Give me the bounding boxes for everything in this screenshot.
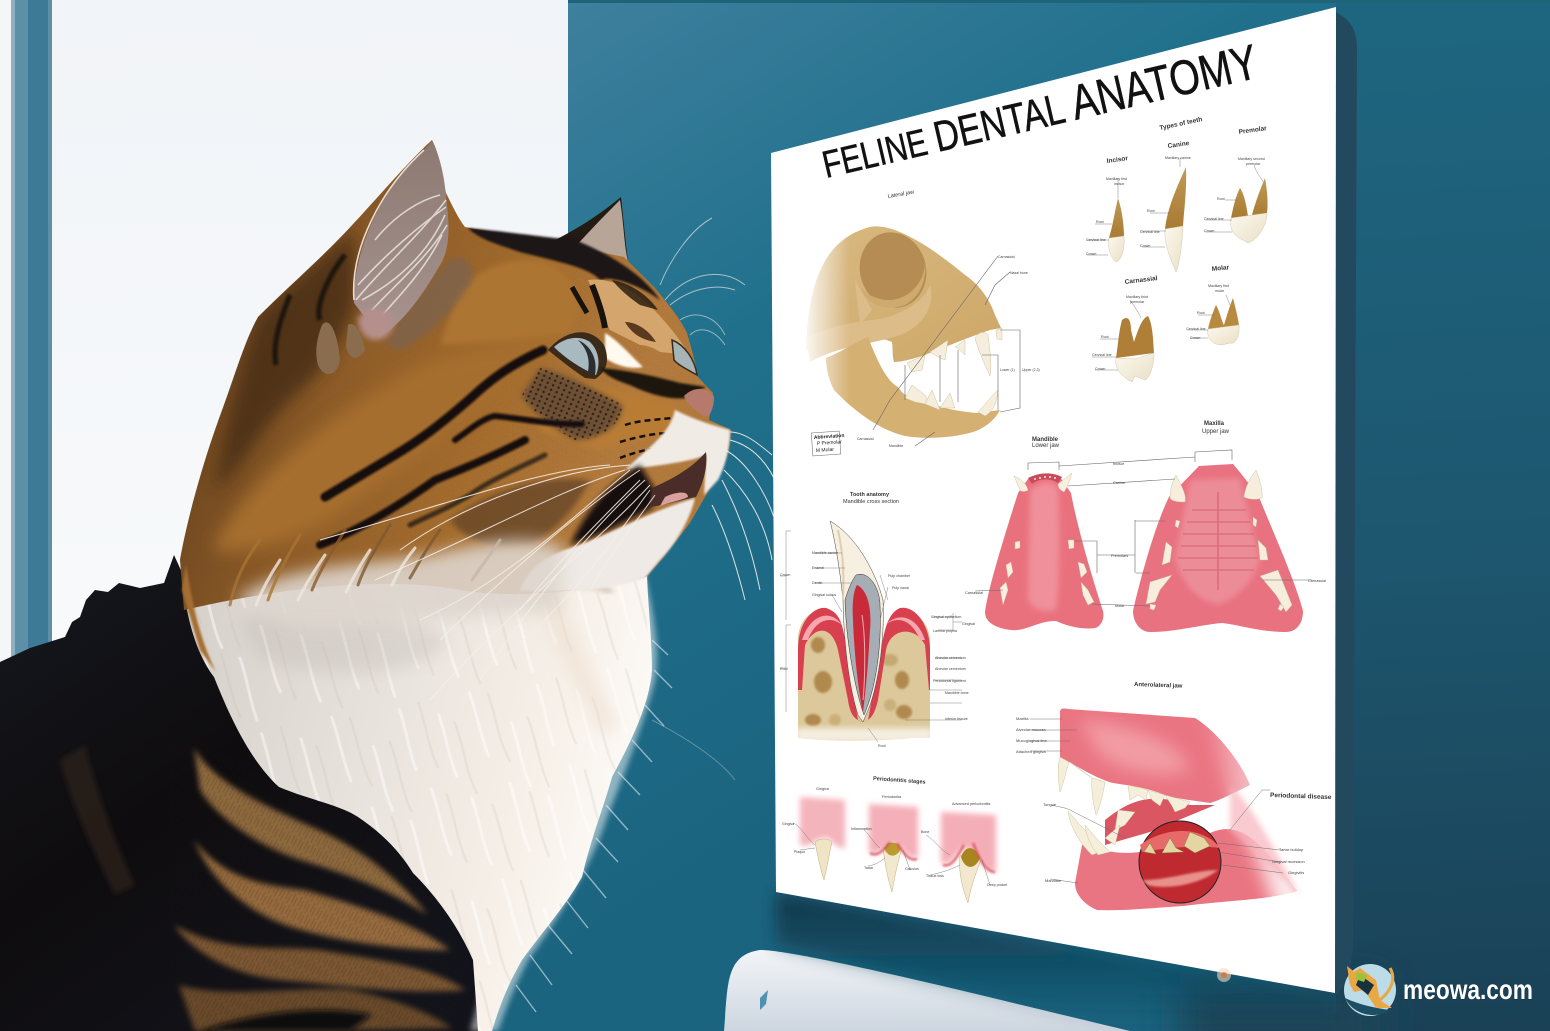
- maxilla upper jaw diagram: Upper jaw: [1202, 429, 1230, 435]
- types of teeth section: Crown: [1086, 252, 1096, 256]
- tooth anatomy cross section: Gingival: [962, 622, 975, 626]
- mandible lower jaw diagram: [985, 437, 1103, 630]
- watermark logo: [1344, 964, 1533, 1016]
- anterolateral jaw: Attached gingiva: [1016, 749, 1046, 754]
- jaw connector labels: [965, 450, 1326, 608]
- cat: head: [180, 140, 740, 672]
- cat: dark striped body: [0, 555, 490, 1031]
- tooth anatomy cross section: Gingival epithelium: [931, 615, 961, 619]
- tooth anatomy cross section: Mandible cross section: [843, 499, 899, 505]
- cat: whiskers: [320, 218, 775, 780]
- types of teeth section: Root: [1101, 335, 1109, 339]
- lateral jaw section: Lateral jaw: [887, 189, 915, 200]
- tooth anatomy cross section: Dentin: [812, 581, 822, 585]
- canine: [1165, 167, 1186, 272]
- tooth anatomy cross section: Tooth anatomy: [850, 492, 890, 498]
- skull fade: [800, 220, 850, 420]
- lateral jaw section: Mandible: [889, 444, 903, 448]
- cat: white above eye: [605, 333, 643, 368]
- tooth anatomy cross section: Periodontal ligament: [933, 679, 966, 683]
- cat: forehead tabby: [572, 280, 690, 355]
- anterolateral jaw: Gingivitis: [1288, 870, 1304, 875]
- lateral jaw section: Carnassial: [857, 437, 874, 441]
- tooth anatomy cross section: Lamina propria: [933, 629, 957, 633]
- types of teeth section: Crown: [1140, 244, 1150, 248]
- periodontal disease label: Periodontal disease: [1270, 792, 1332, 801]
- palate and inside mouth: [1110, 785, 1229, 852]
- cat: [0, 140, 775, 1031]
- skull upper: [806, 226, 1001, 362]
- periodontitis stages: Tissue loss: [926, 874, 944, 878]
- types of teeth section: molar: [1215, 289, 1225, 293]
- types of teeth section: Root: [1217, 197, 1225, 201]
- gingiva: [798, 608, 863, 722]
- types of teeth section: Crown: [1190, 336, 1200, 340]
- anterolateral jaw: Alveolar mucosa: [1016, 727, 1046, 732]
- lateral jaw section: Upper (2,3): [1022, 368, 1040, 372]
- abbreviation box: Abbreviation: [814, 433, 845, 441]
- tooth anatomy cross section: Mandible canine: [812, 551, 838, 555]
- cat: nose: [684, 389, 714, 417]
- tooth anatomy cross section: Root: [878, 744, 886, 748]
- cat: chin white: [520, 498, 695, 592]
- incisor: [1108, 198, 1124, 262]
- cat: far eye: [672, 340, 697, 375]
- types of teeth section: Crown: [1204, 229, 1214, 233]
- tooth anatomy cross section: [780, 492, 975, 748]
- types of teeth section: Maxillary first: [1208, 284, 1229, 288]
- anterolateral jaw: Mandible: [1045, 878, 1062, 883]
- types of teeth section: Cervical line: [1140, 230, 1160, 234]
- cat: cheek orange: [540, 375, 680, 450]
- lateral jaw section: [800, 189, 1040, 456]
- tooth anatomy cross section: Crown: [780, 573, 790, 577]
- upper jaw: [1060, 708, 1250, 803]
- cat: chest edge fuzz: [516, 640, 672, 1012]
- poster corner logo: [1217, 968, 1231, 982]
- poster backing: [1320, 8, 1357, 995]
- tooth anatomy cross section: Alveolar cementum: [935, 656, 966, 660]
- periodontitis stages: Bone: [921, 830, 929, 834]
- types of teeth section: Maxillary second: [1238, 157, 1265, 161]
- lateral jaw section: Nasal bone: [1010, 271, 1028, 275]
- bone blocks: [798, 610, 930, 741]
- types of teeth section: Root: [1147, 209, 1155, 213]
- cat: ear: [354, 141, 448, 337]
- carnassial: [1116, 316, 1154, 382]
- mandible lower jaw diagram: Mandible: [1032, 437, 1059, 443]
- window and frame: [0, 0, 568, 680]
- jaw connector labels: Canine: [1113, 481, 1125, 485]
- tooth anatomy cross section: Gingival sulcus: [812, 593, 836, 597]
- types of teeth section: Incisor: [1106, 155, 1129, 165]
- anterolateral jaw: Anterolateral jaw: [1134, 682, 1183, 690]
- logo icon: [1344, 964, 1396, 1016]
- periodontitis stages: Calculus: [905, 867, 919, 871]
- cat: dark crease by ear: [275, 255, 345, 365]
- white fade right: [1200, 705, 1300, 920]
- types of teeth section: incisor: [1114, 182, 1125, 186]
- lateral jaw section: Lower (1): [1000, 368, 1015, 372]
- types of teeth section: Carnassial: [1124, 275, 1158, 286]
- cat: chest halo: [470, 575, 657, 1031]
- jaw connector labels: Incisor: [1113, 462, 1125, 466]
- tooth anatomy cross section: Pulp chamber: [888, 574, 911, 578]
- anterolateral jaw: [1016, 682, 1332, 920]
- zygomatic arch: [806, 285, 931, 362]
- periodontitis stages: Inflammation: [851, 827, 872, 831]
- cat: neck brown side: [182, 565, 216, 672]
- cat: speckled cheek patch: [522, 368, 622, 440]
- cat: nose bridge dark: [600, 368, 706, 398]
- wall device: [724, 950, 1130, 1031]
- cat: white muzzle: [625, 410, 730, 495]
- types of teeth section: Root: [1197, 311, 1205, 315]
- types of teeth section: Cervical line: [1086, 238, 1106, 242]
- molar: [1208, 298, 1239, 345]
- maxilla upper jaw diagram: Maxilla: [1204, 421, 1225, 427]
- cat: near eye: [548, 332, 607, 379]
- periodontitis stages: Advanced periodontitis: [952, 802, 991, 806]
- cat: far ear: [555, 197, 628, 270]
- stage 1: [800, 797, 845, 880]
- cat: ear folds: [316, 322, 365, 374]
- lower jaw: [1075, 829, 1297, 910]
- anterolateral jaw: Gingival recession: [1272, 859, 1305, 864]
- types of teeth section: Crown: [1095, 367, 1105, 371]
- cat: dark under jaw: [570, 465, 655, 545]
- stage 2: [869, 804, 918, 892]
- cat: white chest fur: [184, 500, 652, 1031]
- types of teeth section: [1086, 116, 1268, 382]
- cat: cheek to chest transition: [235, 541, 565, 630]
- types of teeth section: Cervical line: [1204, 217, 1224, 221]
- anterolateral jaw: Tongue: [1043, 802, 1057, 807]
- poster shadow: [776, 892, 1335, 1031]
- periodontitis stages: Deep pocket: [987, 883, 1007, 887]
- periodontitis stages: Plaque: [794, 850, 805, 854]
- cat: whisker rows dots: [620, 418, 680, 458]
- jaw teeth: [1058, 757, 1190, 855]
- tooth anatomy cross section: Enamel: [812, 566, 824, 570]
- types of teeth section: premolar: [1246, 162, 1261, 166]
- anterolateral jaw: Mucogingival line: [1016, 738, 1047, 743]
- stage 3: [941, 812, 996, 903]
- orbit: [851, 225, 935, 315]
- types of teeth section: Maxillary canine: [1165, 156, 1191, 160]
- periodontitis stages: Gingiva: [816, 787, 830, 791]
- anterolateral jaw: Maxilla: [1016, 716, 1029, 721]
- periodontitis stages: [782, 776, 1007, 903]
- types of teeth section: Canine: [1167, 140, 1190, 150]
- periodontitis stages: Gingiva: [782, 822, 794, 826]
- jaw connector labels: Molar: [1115, 604, 1125, 608]
- tooth anatomy cross section: Mandible bone: [945, 691, 969, 695]
- abbreviation box: [811, 431, 845, 456]
- cat: head clipped shading: [211, 228, 552, 557]
- teeth: [905, 328, 1002, 416]
- tooth anatomy cross section: Root: [780, 667, 788, 671]
- types of teeth section: Cervical line: [1186, 327, 1206, 331]
- canine tooth body: [830, 521, 883, 722]
- cat: bottom black patch: [200, 1010, 372, 1031]
- types of teeth section: Types of teeth: [1159, 116, 1203, 132]
- types of teeth section: Root: [1096, 220, 1104, 224]
- poster: [771, 7, 1336, 993]
- jaw connector labels: Premolars: [1111, 554, 1128, 558]
- types of teeth section: Cervical line: [1092, 353, 1112, 357]
- cat: mouth: [650, 452, 706, 507]
- anterolateral jaw: Tartar buildup: [1279, 847, 1304, 852]
- cat: black crown band: [468, 228, 660, 300]
- periodontitis stages: Periodontitis stages: [873, 776, 926, 786]
- types of teeth section: Molar: [1211, 264, 1230, 273]
- tooth anatomy cross section: Inferior fissure: [945, 717, 968, 721]
- periodontitis stages: Tartar: [864, 866, 874, 870]
- cat: brown stripes: [60, 745, 465, 1031]
- lateral jaw section: Carnassial: [998, 255, 1015, 259]
- abbreviation box: P Premolar: [817, 439, 842, 447]
- jaw connector labels: Carnassial: [965, 591, 983, 595]
- types of teeth section: Premolar: [1238, 125, 1268, 136]
- tooth anatomy cross section: Pulp canal: [892, 586, 909, 590]
- types of teeth section: Maxillary first: [1106, 177, 1127, 181]
- periodontitis stages: Periodontia: [882, 795, 902, 799]
- cat: lower cheek streaks: [450, 479, 590, 547]
- tooth anatomy cross section: Alveolar cementum: [935, 667, 966, 671]
- jaw connector labels: Carnassial: [1308, 579, 1326, 583]
- maxilla upper jaw diagram: [1133, 421, 1303, 632]
- poster title: FELINE DENTAL ANATOMY: [816, 35, 1263, 189]
- zoom circle periodontal: [1139, 821, 1221, 903]
- cat: main black stripes: [320, 350, 582, 545]
- mandible: [826, 337, 1000, 438]
- abbreviation box: M Molar: [816, 447, 834, 454]
- types of teeth section: premolar: [1130, 300, 1145, 304]
- cat: brown to white strands: [230, 525, 500, 605]
- premolar: [1231, 178, 1268, 243]
- mandible lower jaw diagram: Lower jaw: [1032, 443, 1060, 449]
- types of teeth section: Maxillary third: [1126, 295, 1148, 299]
